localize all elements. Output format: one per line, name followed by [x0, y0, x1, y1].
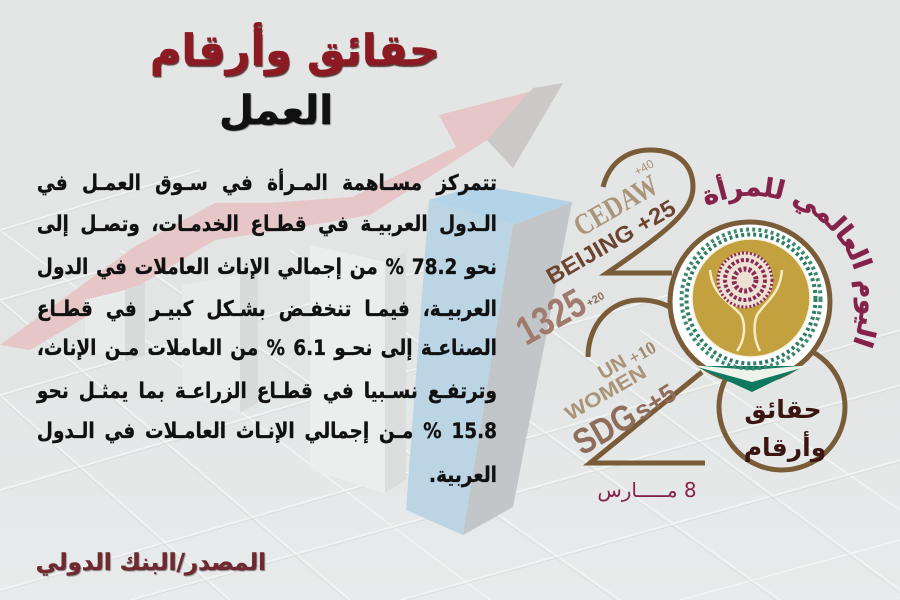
calligraphy medallion [717, 252, 773, 308]
body text: تتمركز مسـاهمة المـرأة في سـوق العمـل في [37, 171, 497, 196]
emblem [670, 222, 830, 392]
body text: نحو 78.2 % من إجمالي الإناث العاملات في الدول [37, 255, 497, 280]
body text: الـدول العربيـة في قطـاع الخدمـات، وتصـل إلى [37, 212, 497, 237]
anniversary labels: +40 [632, 156, 657, 179]
anniversary labels: s+5 [628, 377, 681, 426]
body text: وترتفـع نسـبيا في قطـاع الزراعـة بما يمثـل نحو [37, 379, 497, 404]
wreath [686, 234, 816, 364]
body text: العربيـة، فيمـا تنخفـض بشـكل كبيـر في قطـاع [37, 297, 497, 322]
title: حقائق وأرقام [150, 26, 440, 76]
blue bar [406, 185, 572, 535]
arrow [0, 83, 563, 350]
anniversary labels: UN [594, 351, 631, 384]
body text: العربية. [429, 463, 497, 488]
circle label: حقائق [744, 395, 822, 425]
body text [36, 168, 497, 488]
anniversary labels: +20 [585, 290, 607, 310]
subtitle: العمل [219, 88, 333, 134]
hands and stem [710, 270, 782, 351]
body text: 15.8 % مـن إجمالي الإنـاث العامـلات في الـدول [37, 419, 497, 444]
source: المصدر/البنك الدولي [36, 550, 266, 576]
anniversary labels: WOMEN [562, 361, 650, 425]
numeral 2020 strokes [588, 150, 845, 470]
anniversary labels: +10 [625, 337, 659, 368]
circle label: وأرقام [744, 431, 826, 463]
anniversary labels: SDG [566, 394, 643, 463]
anniversary labels [509, 156, 681, 463]
anniversary labels: BEIJING +25 [542, 194, 680, 289]
date: 8 مـــــارس [597, 478, 697, 502]
small bars [85, 245, 406, 493]
anniversary labels: 1325 [509, 280, 593, 354]
circle label [744, 395, 826, 463]
anniversary labels: CEDAW [568, 168, 664, 243]
curved heading: اليوم العالمي للمرأة [704, 174, 877, 348]
gold disc [692, 239, 810, 357]
body text: الصناعـة إلى نحـو 6.1 % من العاملات مـن الإناث، [37, 336, 497, 361]
